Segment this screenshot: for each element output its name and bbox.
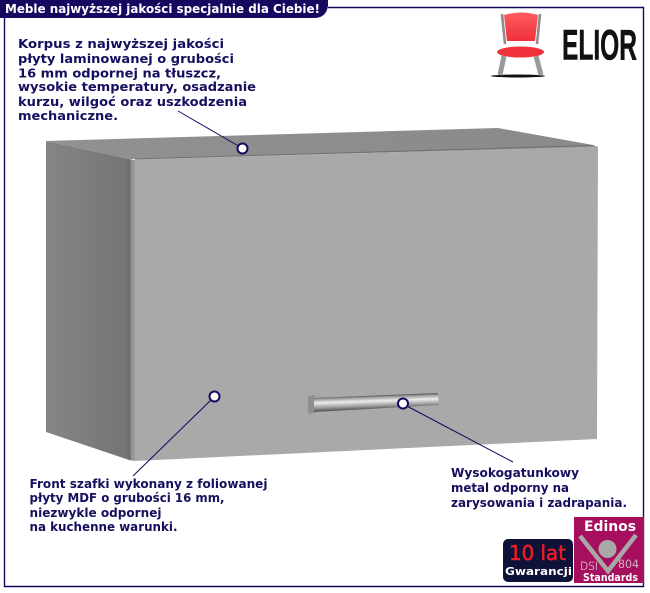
badge: Edinos standards: Standards: [583, 571, 638, 584]
callout line: korpus: [178, 111, 248, 154]
text block: korpus: 16 mm odpornej na tłuszcz,: [18, 66, 221, 80]
callout line: front: [133, 392, 220, 476]
text block: korpus: Korpus z najwyższej jakości: [18, 37, 224, 51]
text block: front: płyty MDF o grubości 16 mm,: [30, 491, 224, 505]
cabinet illustration: [46, 128, 598, 461]
text block: front: niezwykle odpornej: [30, 506, 162, 520]
badge: Edinos standards: DSI: [580, 559, 598, 573]
badge: Edinos standards: Edinos: [584, 519, 636, 535]
text block: front: Front szafki wykonany z foliowanej: [30, 477, 268, 491]
badge: Edinos standards: [574, 517, 644, 584]
cabinet top: [46, 128, 598, 159]
cabinet front: [135, 146, 598, 461]
badge: 10 lat gwarancji: 10 lat: [509, 541, 566, 565]
front top edge shadow: [135, 146, 593, 159]
text block: metal: metal odporny na: [451, 481, 569, 495]
text block: metal: zarysowania i zadrapania.: [451, 496, 627, 510]
text block: front: na kuchenne warunki.: [30, 520, 178, 534]
handle: [308, 393, 439, 414]
text block: korpus: [18, 37, 256, 123]
badge: 10 lat gwarancji: Gwarancji: [505, 566, 572, 578]
text block: korpus: płyty laminowanej o grubości: [18, 52, 234, 66]
text block: metal: Wysokogatunkowy: [451, 466, 579, 480]
text block: front: [30, 477, 268, 534]
cabinet side: [46, 141, 135, 461]
header banner: Meble najwyższej jakości specjalnie dla Ciebie!: [5, 2, 320, 16]
badge: Edinos standards: 804: [618, 557, 639, 571]
text block: metal: [451, 466, 627, 510]
text block: korpus: mechaniczne.: [18, 109, 118, 123]
text block: korpus: wysokie temperatury, osadzanie: [18, 80, 256, 94]
text block: korpus: kurzu, wilgoć oraz uszkodzenia: [18, 95, 247, 109]
icon: red chair logo: [491, 12, 545, 78]
callout line: handle: [398, 398, 513, 462]
badge: 10 lat gwarancji: [503, 539, 573, 582]
